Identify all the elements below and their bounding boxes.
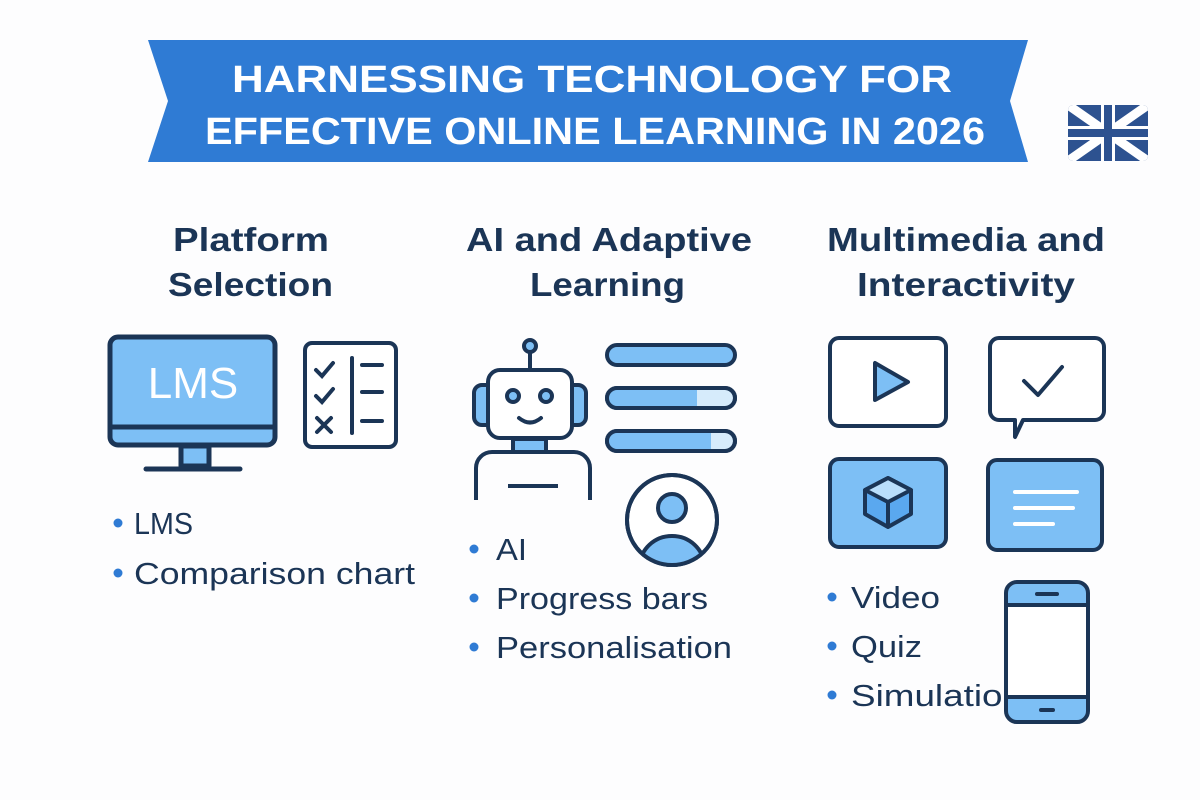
list: AI: Personalisation (496, 630, 732, 665)
icon: LMS monitor: LMS (148, 359, 238, 408)
icon: LMS monitor (110, 337, 275, 469)
heading: Multimedia and Interactivity: Interactivity (857, 266, 1076, 303)
icon: text screen (988, 460, 1102, 550)
list: platform: Comparison chart (134, 556, 415, 591)
list: multimedia: Video (851, 580, 940, 615)
list: platform (114, 506, 415, 591)
list: multimedia: Quiz (851, 629, 922, 664)
title banner: HARNESSING TECHNOLOGY FOR (232, 59, 952, 101)
title banner: EFFECTIVE ONLINE LEARNING IN 2026 (205, 111, 985, 153)
heading: Platform Selection: Platform (173, 221, 329, 258)
heading: AI and Adaptive Learning: AI and Adaptive (466, 221, 752, 258)
list: multimedia (828, 580, 1023, 713)
icon: comparison checklist (305, 343, 396, 447)
icon: simulation cube (830, 459, 946, 547)
title banner (148, 40, 1028, 162)
heading: Platform Selection: Selection (168, 266, 333, 303)
list: platform: LMS (134, 506, 193, 541)
icon: video (830, 338, 946, 426)
heading: AI and Adaptive Learning (466, 221, 752, 303)
list: AI: Progress bars (496, 581, 708, 616)
heading: AI and Adaptive Learning: Learning (530, 266, 685, 303)
icon: progress bars (607, 345, 735, 451)
list: AI: AI (496, 532, 527, 567)
heading: Platform Selection (168, 221, 333, 303)
icon: phone (1006, 582, 1088, 722)
heading: Multimedia and Interactivity: Multimedia and (827, 221, 1105, 258)
icon: UK flag (1068, 105, 1148, 161)
heading: Multimedia and Interactivity (827, 221, 1105, 303)
icon: personalisation user (627, 475, 717, 566)
icon: quiz bubble (990, 338, 1104, 437)
list: multimedia: Simulation (851, 678, 1023, 713)
icon: robot (474, 340, 590, 500)
list: AI (470, 532, 732, 665)
